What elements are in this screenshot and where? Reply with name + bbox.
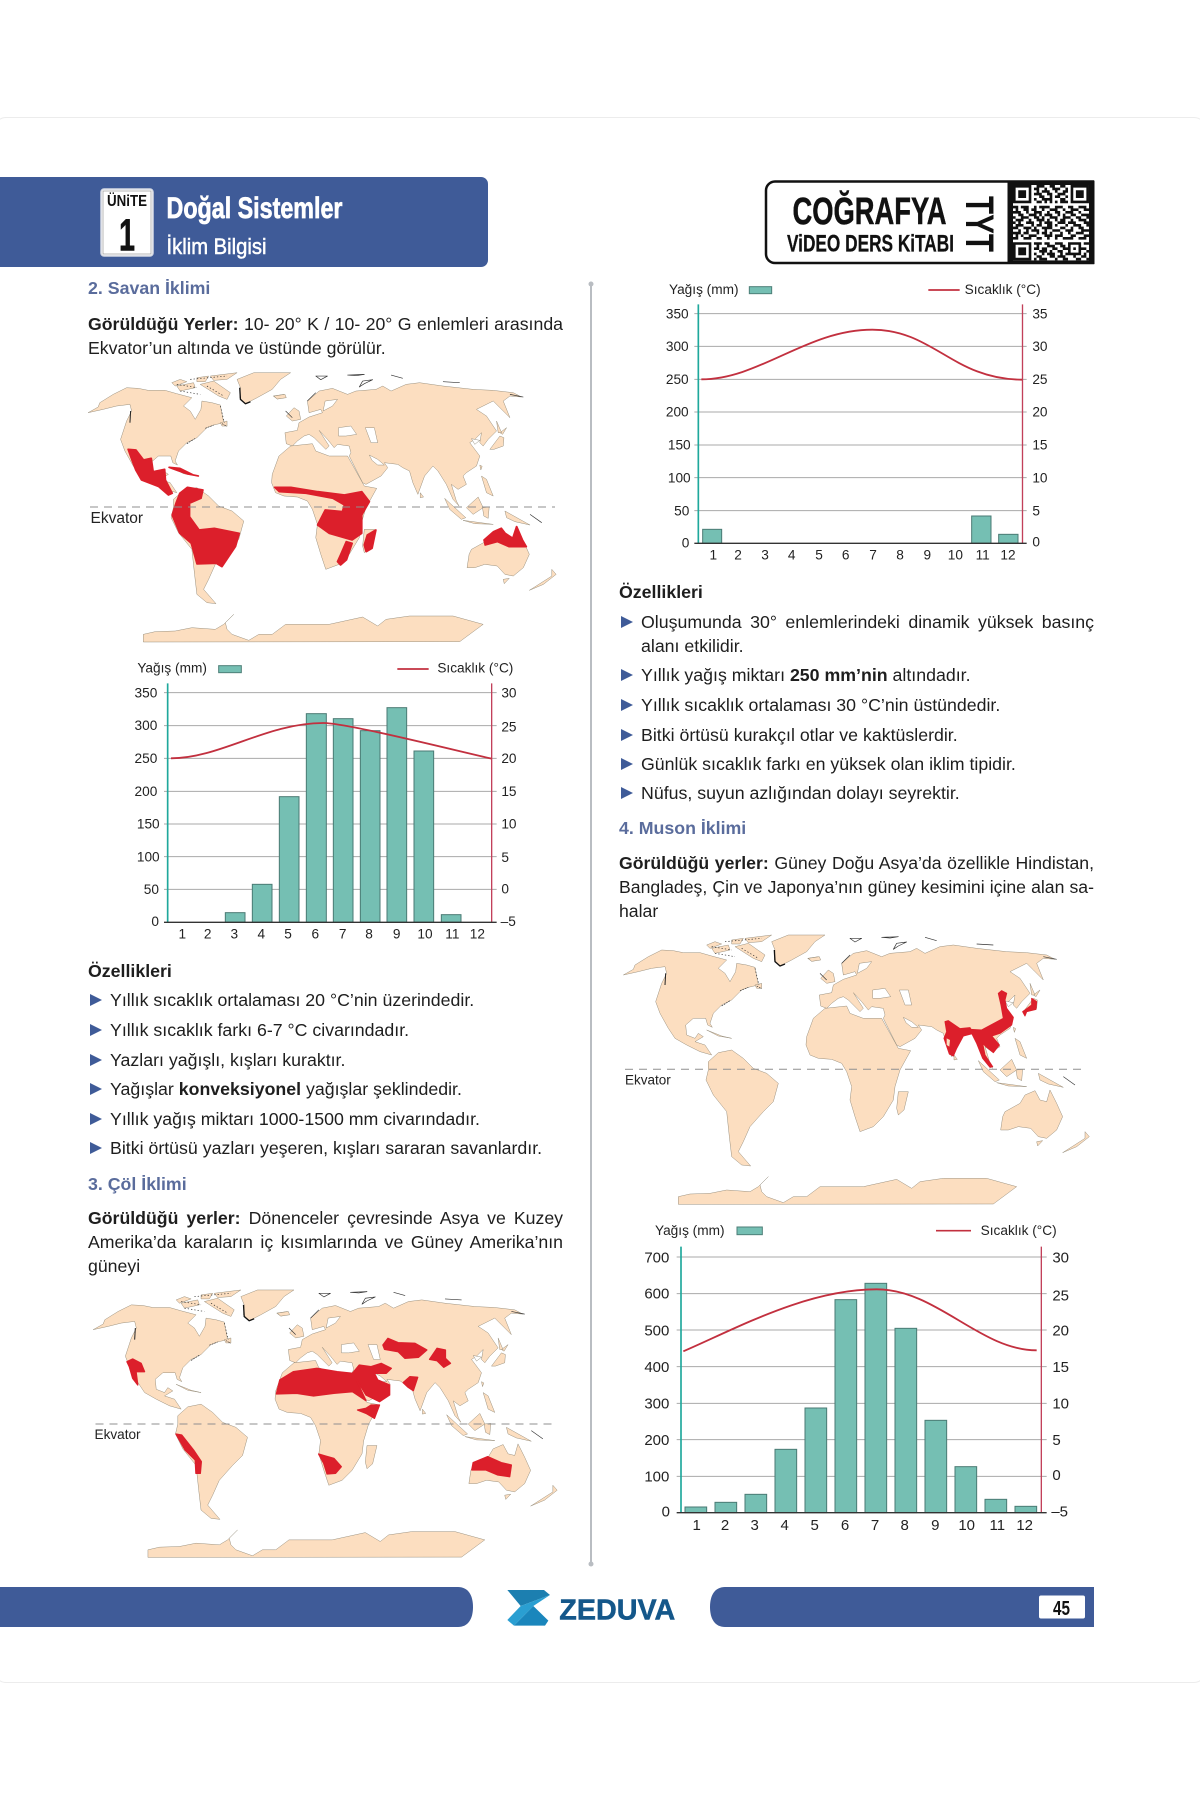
list: desert features: Yıllık sıcaklık ortalaması 30 °C’nin üstündedir. <box>641 695 1000 715</box>
chart: savanna climate: 12 <box>470 926 485 941</box>
axis labels: 250 <box>135 751 158 766</box>
text: monsoon locations: halar <box>619 901 658 921</box>
legend <box>669 282 1041 297</box>
axis labels: 300 <box>644 1395 669 1412</box>
heading: desert features: Özellikleri <box>619 582 703 602</box>
banner subtitle: İklim Bilgisi <box>166 234 266 259</box>
grid <box>677 1257 1047 1476</box>
list: desert features <box>621 612 1094 803</box>
desert regions <box>127 1338 511 1477</box>
axis labels: 0 <box>151 914 159 929</box>
chart: savanna climate: 7 <box>339 926 346 941</box>
chart: savanna climate: 0 <box>501 881 509 896</box>
legend: Yağış (mm) <box>669 282 739 297</box>
chart: monsoon climate <box>644 1223 1069 1534</box>
chart: monsoon climate: 2 <box>721 1517 729 1534</box>
axis labels: 350 <box>135 685 158 700</box>
chart: desert climate: 5 <box>1032 503 1040 518</box>
axis labels: 200 <box>666 405 689 420</box>
unit badge <box>101 189 153 260</box>
chart: savanna climate: 11 <box>445 926 459 941</box>
axes <box>696 304 701 544</box>
chart: monsoon climate: 10 <box>958 1517 975 1534</box>
book logo with QR <box>766 181 1094 264</box>
chart: monsoon climate: 5 <box>810 1517 819 1534</box>
map: savanna climate <box>88 373 556 642</box>
chart: savanna climate: 5 <box>284 926 292 941</box>
chart: monsoon climate: 12 <box>1016 1517 1033 1534</box>
chart: monsoon climate: 7 <box>871 1517 879 1534</box>
chart: savanna climate: 25 <box>501 719 517 734</box>
bars <box>225 708 461 922</box>
chart: savanna climate: 1 <box>179 926 186 941</box>
heading: savanna: 2. Savan İklimi <box>88 278 210 298</box>
map: monsoon climate <box>623 935 1089 1204</box>
list: desert features: Bitki örtüsü kurakçıl otlar ve kaktüslerdir. <box>641 725 958 745</box>
chart: savanna climate <box>135 661 517 941</box>
chart: savanna climate: 3 <box>231 926 238 941</box>
chart: savanna climate: 30 <box>501 685 517 700</box>
bars <box>703 516 1018 543</box>
legend <box>137 661 513 676</box>
chart: desert climate: 30 <box>1032 339 1048 354</box>
text: savanna locations: Ekvator’un altında ve üstünde görülür. <box>88 338 386 358</box>
chart: monsoon climate: –5 <box>1051 1504 1068 1521</box>
list: savanna features <box>90 990 542 1158</box>
chart: desert climate: 25 <box>1032 372 1048 387</box>
chart: monsoon climate: 1 <box>692 1517 701 1534</box>
text: monsoon locations: Bangladeş, Çin ve Japonya’nın güney kesimini içine alan sa- <box>619 877 1094 897</box>
list: savanna features: Yıllık sıcaklık farkı 6-7 °C civarındadır. <box>110 1020 409 1040</box>
axis labels: 100 <box>644 1469 669 1486</box>
column divider <box>588 282 594 1566</box>
axis labels: 0 <box>682 535 690 550</box>
chart: monsoon climate: 15 <box>1052 1359 1069 1376</box>
chart: desert climate: 2 <box>734 547 742 562</box>
grid <box>164 693 497 889</box>
chart: savanna climate: 10 <box>501 817 517 832</box>
chart: savanna climate: 20 <box>501 751 517 766</box>
chart: monsoon climate: 0 <box>1052 1467 1061 1484</box>
footer left bar <box>0 1587 473 1627</box>
text: desert locations: Görüldüğü yerler: Dönenceler çevresinde Asya ve Kuzey <box>88 1208 563 1228</box>
chart: monsoon climate: 3 <box>750 1517 759 1534</box>
list: desert features: alanı etkilidir. <box>641 636 744 656</box>
axes <box>678 1247 683 1513</box>
savanna regions <box>128 449 526 567</box>
unit badge: 1 <box>119 210 135 260</box>
chart: desert climate: 0 <box>1032 535 1040 550</box>
axes <box>165 683 170 923</box>
heading: savanna features: Özellikleri <box>88 961 172 981</box>
grid <box>694 314 1027 511</box>
equator label: Ekvator <box>625 1072 671 1087</box>
chart: savanna climate: 4 <box>258 926 266 941</box>
axis labels: 150 <box>668 438 691 453</box>
axis labels <box>644 1249 670 1521</box>
list: savanna features: Bitki örtüsü yazları yeşeren, kışları sararan savanlardır. <box>110 1138 542 1158</box>
publisher logo <box>507 1590 675 1626</box>
chart: savanna climate: 9 <box>393 926 400 941</box>
list: desert features: Oluşumunda 30° enlemlerindeki dinamik yüksek basınç <box>641 612 1094 632</box>
chart: monsoon climate: 20 <box>1052 1322 1069 1339</box>
chart: desert climate: 8 <box>896 547 904 562</box>
header banner <box>0 177 488 267</box>
axis labels: 200 <box>644 1432 669 1449</box>
chart: savanna climate: 2 <box>204 926 211 941</box>
axis labels: 500 <box>644 1322 669 1339</box>
equator line <box>625 1068 1087 1070</box>
QR code <box>1013 185 1089 260</box>
legend: Yağış (mm) <box>137 661 207 676</box>
text: monsoon locations: Görüldüğü yerler: Güney Doğu Asya’da özellikle Hindistan, <box>619 853 1094 873</box>
chart: monsoon climate: 5 <box>1052 1432 1061 1449</box>
axis labels: 250 <box>666 372 689 387</box>
chart: monsoon climate: 6 <box>841 1517 849 1534</box>
unit badge: ÜNiTE <box>107 193 147 210</box>
chart: monsoon climate: 9 <box>931 1517 940 1534</box>
text: desert locations: Amerika’da karaların iç kısımlarında ve Güney Amerika’nın <box>88 1232 563 1252</box>
chart: desert climate: 1 <box>710 547 717 562</box>
chart: desert climate: 10 <box>948 547 963 562</box>
list: savanna features: Yağışlar konveksiyonel yağışlar şeklindedir. <box>110 1079 462 1099</box>
axis labels: 50 <box>144 882 159 897</box>
chart: monsoon climate: 25 <box>1052 1287 1069 1304</box>
legend: Sıcaklık (°C) <box>437 661 513 676</box>
chart: savanna climate: 6 <box>312 926 319 941</box>
axis labels: 300 <box>666 339 689 354</box>
legend <box>655 1223 1057 1238</box>
axis labels: 0 <box>662 1504 670 1521</box>
axis labels: 100 <box>668 470 691 485</box>
legend: Sıcaklık (°C) <box>965 282 1041 297</box>
temperature curve <box>701 330 1022 380</box>
footer right bar with page number: 45 <box>1053 1598 1070 1620</box>
legend: Yağış (mm) <box>655 1223 725 1238</box>
chart: desert climate: 11 <box>976 547 990 562</box>
chart: desert climate: 20 <box>1032 405 1048 420</box>
footer right bar with page number <box>710 1587 1094 1627</box>
axis labels: 300 <box>135 718 158 733</box>
chart: monsoon climate: 10 <box>1052 1395 1069 1412</box>
axis labels: 100 <box>137 849 160 864</box>
text: desert locations: güneyi <box>88 1256 140 1276</box>
chart: monsoon climate: 4 <box>780 1517 789 1534</box>
chart: savanna climate: 15 <box>501 784 517 799</box>
chart: desert climate: 15 <box>1032 438 1048 453</box>
chart: savanna climate: 5 <box>501 850 509 865</box>
axis labels: 700 <box>644 1249 669 1266</box>
chart: desert climate: 6 <box>842 547 849 562</box>
text: monsoon locations <box>619 853 1094 921</box>
axis labels: 50 <box>674 503 690 518</box>
chart: monsoon climate: 8 <box>900 1517 909 1534</box>
axis labels: 200 <box>135 784 158 799</box>
axis labels <box>135 685 160 929</box>
text: desert locations <box>88 1208 563 1276</box>
chart: monsoon climate: 11 <box>990 1517 1005 1534</box>
axis labels: 350 <box>666 306 689 321</box>
chart: savanna climate: 8 <box>365 926 373 941</box>
equator label: Ekvator <box>94 1427 141 1442</box>
list: desert features: Yıllık yağış miktarı 250 mm’nin altındadır. <box>641 665 971 685</box>
chart: desert climate: 4 <box>788 547 796 562</box>
banner title: Doğal Sistemler <box>166 192 343 225</box>
legend: Sıcaklık (°C) <box>981 1223 1057 1238</box>
temperature curve <box>171 723 492 759</box>
list: desert features: Günlük sıcaklık farkı en yüksek olan iklim tipidir. <box>641 754 1016 774</box>
map: desert climate <box>93 1290 557 1557</box>
axis labels: 150 <box>137 817 160 832</box>
chart: desert climate: 12 <box>1000 547 1016 562</box>
list: savanna features: Yıllık sıcaklık ortalaması 20 °C’nin üzerindedir. <box>110 990 474 1010</box>
axis labels: 400 <box>644 1359 669 1376</box>
list: savanna features: Yıllık yağış miktarı 1000-1500 mm civarındadır. <box>110 1109 480 1129</box>
list: savanna features: Yazları yağışlı, kışları kuraktır. <box>110 1050 345 1070</box>
chart: desert climate: 3 <box>761 547 769 562</box>
chart: desert climate <box>666 282 1048 562</box>
axis labels <box>666 306 691 550</box>
text: savanna locations: Görüldüğü Yerler: 10- 20° K / 10- 20° G enlemleri arasında <box>88 314 563 334</box>
chart: savanna climate: 10 <box>417 926 433 941</box>
heading: monsoon: 4. Muson İklimi <box>619 818 746 838</box>
equator label: Ekvator <box>90 510 143 527</box>
equator line <box>90 506 555 508</box>
equator line <box>96 1423 555 1425</box>
chart: monsoon climate: 30 <box>1052 1249 1069 1266</box>
book logo with QR: TYT <box>957 196 1001 252</box>
list: desert features: Nüfus, suyun azlığından dolayı seyrektir. <box>641 783 960 803</box>
chart: desert climate: 10 <box>1032 470 1048 485</box>
chart: desert climate: 7 <box>869 547 877 562</box>
publisher logo: ZEDUVA <box>559 1594 675 1626</box>
book logo with QR: ViDEO DERS KiTABI <box>787 230 954 258</box>
chart: savanna climate: –5 <box>501 914 516 929</box>
book logo with QR: COĞRAFYA <box>792 189 946 233</box>
text: savanna locations <box>88 314 563 358</box>
axis labels: 600 <box>644 1285 669 1302</box>
chart: desert climate: 5 <box>815 547 823 562</box>
heading: desert: 3. Çöl İklimi <box>88 1174 187 1194</box>
chart: desert climate: 9 <box>924 547 931 562</box>
bars <box>685 1283 1037 1513</box>
monsoon regions <box>944 991 1037 1067</box>
temperature curve <box>683 1289 1037 1351</box>
chart: desert climate: 35 <box>1032 306 1048 321</box>
